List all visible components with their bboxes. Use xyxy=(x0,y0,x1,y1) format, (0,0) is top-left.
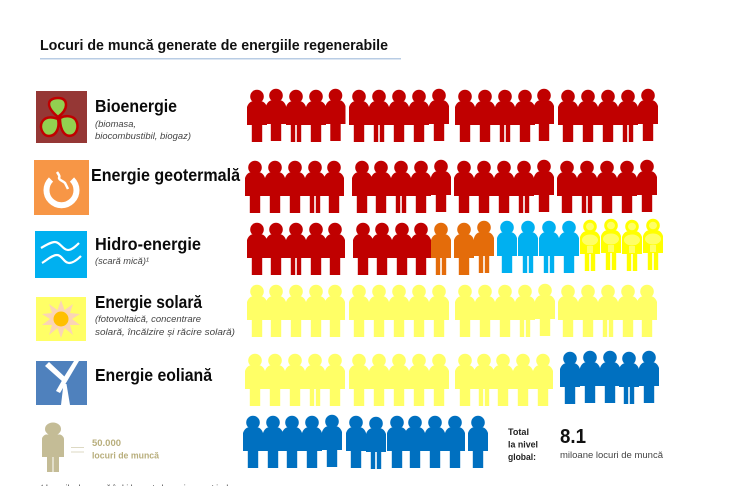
total label: Total xyxy=(508,427,529,437)
label: hydro: Hidro-energie xyxy=(95,234,201,254)
legend: person icon equals 50.000 jobs: 50.000 xyxy=(92,438,121,449)
label: solar: Energie solară xyxy=(95,292,202,312)
label: hydro xyxy=(95,234,201,267)
label: solar: (fotovoltaică, concentrare xyxy=(95,314,201,325)
total value: 8.1 xyxy=(560,426,586,448)
total label: global: xyxy=(508,452,536,462)
persons: hydro row xyxy=(247,219,663,275)
persons: solar row xyxy=(247,284,657,337)
label: bioenergy: biocombustibil, biogaz) xyxy=(95,131,191,142)
total label xyxy=(508,427,538,462)
title: Locuri de muncă generate de energiile regenerabile xyxy=(40,37,388,54)
label: bioenergy xyxy=(95,96,191,142)
icon: bioenergy xyxy=(36,91,87,143)
label: wind: Energie eoliană xyxy=(95,365,212,385)
persons: bioenergy row xyxy=(247,89,658,142)
label: bioenergy: (biomasa, xyxy=(95,119,136,130)
title underline xyxy=(40,58,401,60)
label: solar: solară, încălzire și răcire solară) xyxy=(95,327,235,338)
total label: la nivel xyxy=(508,440,538,450)
label: geothermal: Energie geotermală xyxy=(91,165,240,185)
icon: hydro xyxy=(35,231,87,278)
persons: geothermal row xyxy=(245,160,657,213)
icon: geothermal xyxy=(34,160,89,215)
label: solar xyxy=(95,292,235,338)
icon: solar xyxy=(36,297,86,341)
label: bioenergy: Bioenergie xyxy=(95,96,177,116)
icon: wind xyxy=(36,361,87,405)
persons: total row xyxy=(243,415,488,469)
label: hydro: (scară mică)¹ xyxy=(95,256,149,267)
legend: person icon equals 50.000 jobs xyxy=(42,422,160,472)
legend: person icon equals 50.000 jobs: locuri de muncă xyxy=(92,450,160,462)
total value: miloane locuri de muncă xyxy=(560,450,664,461)
total value xyxy=(560,426,664,461)
persons: wind row xyxy=(245,351,659,406)
